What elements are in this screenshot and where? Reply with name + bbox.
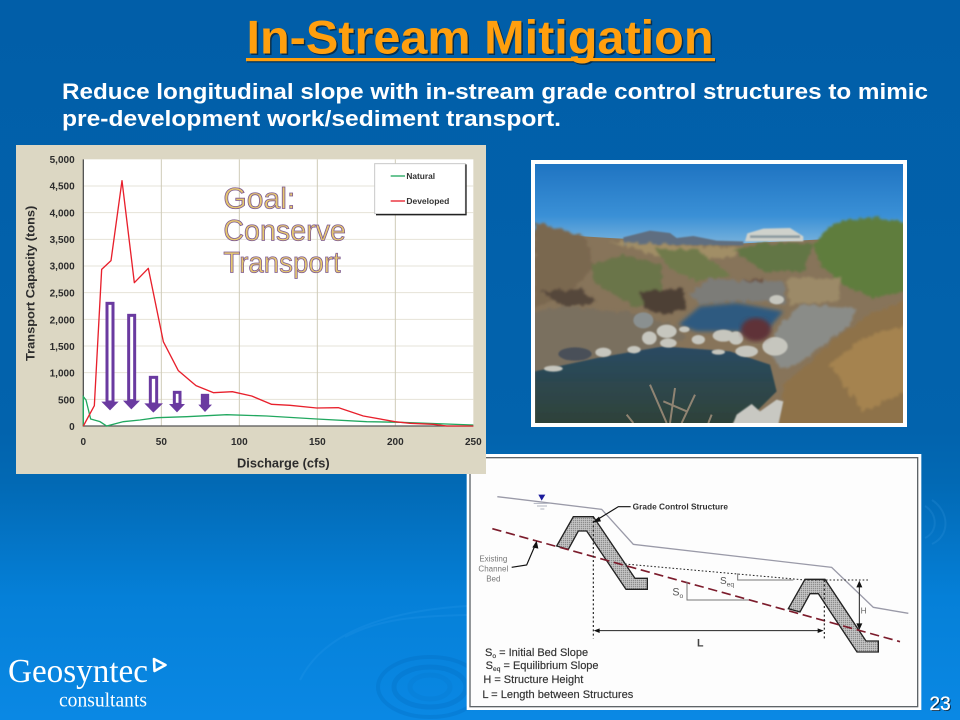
- legend: Natural: [406, 171, 435, 181]
- leader lines: [512, 507, 631, 567]
- diagram legend: H = Structure Height: [483, 674, 583, 686]
- y axis labels: 3,500: [50, 235, 75, 246]
- diagram legend: eq: [493, 666, 501, 673]
- page number: 23: [931, 695, 952, 716]
- logo: Geosyntec consultants: Geosyntec: [8, 653, 148, 690]
- y axis labels: 3,000: [50, 262, 75, 273]
- x axis labels: 200: [387, 437, 404, 448]
- distant hills: [623, 231, 743, 245]
- x axis labels: [81, 437, 482, 448]
- developed line: [83, 181, 473, 426]
- structure centre dotted lines: [593, 517, 824, 639]
- icon: water level marker: [534, 495, 550, 509]
- goal text: Conserve: [223, 215, 346, 248]
- y axis title: Transport Capacity (tons): [24, 206, 37, 361]
- subtitle text: Reduce longitudinal slope with in-stream grade control structures to mimic: [62, 79, 928, 104]
- x axis labels: 50: [156, 437, 167, 448]
- rock ring: [530, 278, 787, 375]
- diagram labels: S: [672, 586, 679, 598]
- H dimension arrow: [856, 581, 862, 630]
- grid lines: [83, 186, 473, 399]
- diagram labels: o: [679, 593, 683, 600]
- diagram labels: [478, 502, 867, 650]
- x axis labels: 150: [309, 437, 326, 448]
- diagram labels: Existing: [479, 554, 507, 563]
- diagram legend: L = Length between Structures: [482, 689, 634, 701]
- icon: triangle mark: [154, 659, 166, 671]
- grade control structure 1: [557, 517, 647, 589]
- x axis labels: 100: [231, 437, 248, 448]
- purple arrows: [101, 303, 212, 413]
- page number: 23: [930, 694, 951, 715]
- diagram labels: Channel: [478, 564, 508, 573]
- x axis title: Discharge (cfs): [237, 456, 330, 470]
- y axis labels: [50, 155, 75, 433]
- legend: Developed: [406, 196, 449, 206]
- y axis labels: 2,500: [50, 288, 75, 299]
- building: [745, 228, 803, 241]
- diagram legend: o: [492, 653, 496, 660]
- y axis labels: 500: [58, 395, 75, 406]
- water lower pool: [535, 346, 777, 425]
- panel: grade control diagram: [466, 454, 922, 710]
- diagram legend: S: [485, 647, 492, 659]
- pale stepping rocks: [544, 295, 788, 372]
- logo: Geosyntec consultants: [8, 653, 167, 712]
- existing channel bed dashed line: [492, 529, 900, 642]
- y axis labels: 1,500: [50, 342, 75, 353]
- water surface line: [497, 497, 908, 613]
- diagram labels: Bed: [486, 574, 500, 583]
- diagram labels: H: [861, 606, 867, 616]
- legend: [375, 164, 466, 215]
- y axis labels: 4,000: [50, 208, 75, 219]
- rocks right bank: [767, 305, 857, 368]
- diagram labels: S: [720, 576, 727, 587]
- goal text: Transport: [223, 246, 341, 279]
- foreground twigs: [627, 385, 712, 423]
- title: In-Stream Mitigation: [248, 12, 715, 65]
- water upper pool: [678, 303, 783, 335]
- base ground: [530, 233, 910, 428]
- y axis labels: 2,000: [50, 315, 75, 326]
- y axis labels: 0: [69, 422, 75, 433]
- x axis labels: 0: [81, 437, 87, 448]
- diagram legend: = Initial Bed Slope: [496, 647, 588, 659]
- logo: Geosyntec consultants: consultants: [59, 690, 147, 712]
- y axis labels: 1,000: [50, 369, 75, 380]
- panel: transport capacity chart: [16, 145, 486, 474]
- diagram labels: eq: [727, 581, 734, 588]
- subtitle text: pre-development work/sediment transport.: [62, 106, 561, 131]
- y axis labels: 5,000: [50, 155, 75, 166]
- plot area: [83, 159, 473, 426]
- slope brackets: [687, 573, 793, 600]
- diagram legend: = Equilibrium Slope: [500, 660, 599, 672]
- diagram legend: S: [486, 660, 493, 672]
- grade control structure 2: [788, 579, 878, 652]
- goal text: [223, 182, 346, 279]
- panel: stream photo: [531, 160, 907, 427]
- L dimension arrow: [594, 628, 824, 633]
- red shrub: [741, 318, 771, 341]
- subtitle text: [62, 79, 928, 131]
- sky: [535, 164, 903, 244]
- diagram labels: Grade Control Structure: [633, 502, 728, 512]
- foreground rocks: [733, 400, 783, 425]
- dry grass bank right: [780, 300, 903, 423]
- diagram legend: [482, 647, 634, 701]
- diagram labels: L: [697, 638, 704, 650]
- goal text: Goal:: [223, 182, 295, 215]
- x axis labels: 250: [465, 437, 482, 448]
- equilibrium slope dotted line: [625, 564, 868, 580]
- y axis labels: 4,500: [50, 182, 75, 193]
- title: In-Stream Mitigation: [246, 10, 714, 64]
- natural line: [83, 397, 473, 426]
- vegetation and dry grass bank: [535, 218, 907, 315]
